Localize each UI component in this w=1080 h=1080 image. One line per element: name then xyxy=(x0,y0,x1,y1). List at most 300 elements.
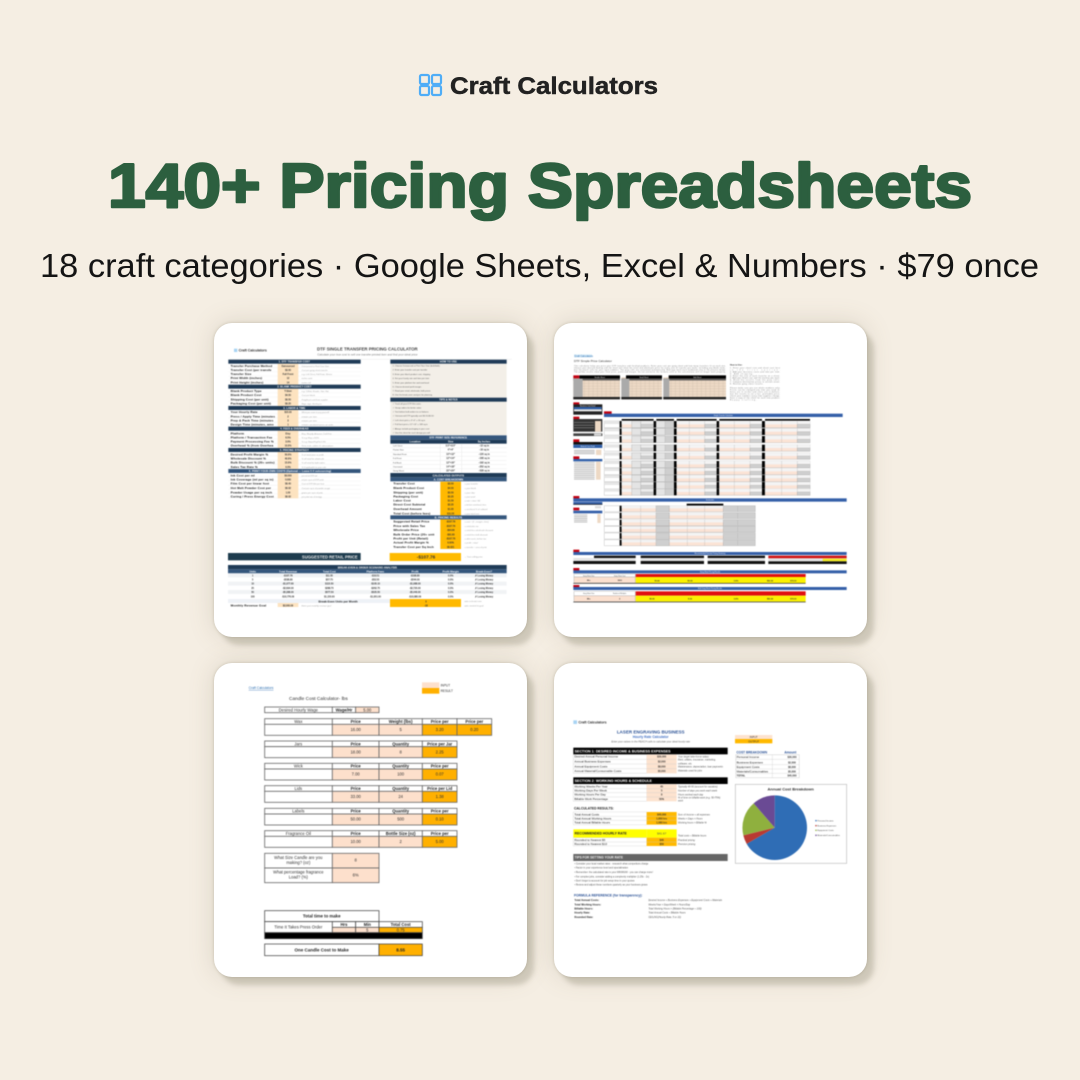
calculated outputs: $0.50 xyxy=(448,492,454,494)
left column: input sections: 40.0% xyxy=(285,457,292,460)
pie chart: annual cost breakdown: Annual Cost Breakdown xyxy=(768,787,814,792)
section 2 xyxy=(573,777,728,803)
calculated outputs: -$107.76 xyxy=(446,522,456,524)
break-even analysis table: Break-Even Units per Month xyxy=(319,599,358,603)
cost breakdown table: Materials/Consumables xyxy=(737,769,769,773)
break-even analysis table: $115.50 xyxy=(325,584,334,586)
calculated results xyxy=(573,807,711,825)
left column: input sections: 1 xyxy=(287,425,289,427)
jar table: 2.25 xyxy=(436,749,444,754)
break-even analysis table: -$108.80 xyxy=(410,575,420,577)
left column: input sections: $0.000 xyxy=(284,475,292,477)
calculated outputs: $4.50 xyxy=(448,487,454,490)
break-even analysis table: Platform Fees xyxy=(367,569,385,573)
calculated outputs: Shipping (per unit) xyxy=(393,490,423,494)
formula reference: Total Working Hours × (Billable Percentage ÷ 100) xyxy=(648,908,702,911)
break-even analysis table: $577.50 xyxy=(325,592,334,594)
labels table: 50.00 xyxy=(350,817,362,822)
sheet heading and instructions: Sizes are in inches and costs are in dollars. xyxy=(730,390,781,393)
labels table: Price xyxy=(351,809,361,814)
break-even analysis table: -$2,694.00 xyxy=(282,587,294,590)
wick table: Price xyxy=(351,764,361,769)
section 1: Materials used for jobs xyxy=(678,770,703,773)
calculated outputs: = your pack xyxy=(465,495,476,498)
left column: input sections: Cost per blank xyxy=(302,394,316,397)
left column: input sections: Cost of DTF film per foot xyxy=(302,483,324,486)
break-even analysis table: -$105.10 xyxy=(371,584,381,586)
calculated outputs: $2.25 xyxy=(448,505,454,507)
size reference table: Full Front xyxy=(393,457,402,460)
legend xyxy=(735,735,772,743)
brand and heading: Enter your values in the PEACH cells to calculate your ideal hourly rate xyxy=(611,740,691,743)
legend: INPUT xyxy=(750,735,758,739)
break-even analysis table: ✗ Losing Money xyxy=(475,591,494,594)
calculated outputs: -$91.60 xyxy=(447,534,455,536)
left column: input sections: e.g. Left Chest, Full Front, Sleeve xyxy=(302,373,333,376)
yellow results row one: $70.00 xyxy=(790,580,797,582)
left column: input sections: 12 xyxy=(287,378,290,380)
left column: input sections: Freight per unit from supplier xyxy=(302,398,328,401)
lids table: Quantity xyxy=(392,786,410,791)
section 2: Billable Work Percentage xyxy=(574,797,608,801)
calculated outputs: -$107.76 xyxy=(446,539,456,541)
section 2: 8 xyxy=(661,794,663,797)
wax table: 0.20 xyxy=(470,727,479,732)
left stack of small tables: Material Cost Profit xyxy=(581,445,595,448)
break-even analysis table: ✗ Losing Money xyxy=(475,574,494,577)
left column: input sections: Blank Product Cost xyxy=(231,393,261,397)
size reference table: Location xyxy=(409,440,421,444)
right column: how to use and tips: 5. Enter your platform fee and overhead xyxy=(393,381,429,384)
left column: input sections: Full Front xyxy=(283,373,294,376)
left column: input sections: minutes per item xyxy=(302,419,317,422)
sheet heading and instructions: Use the results to set a fair, profitable price. xyxy=(730,392,781,395)
section 1: Annual Material/Consumable Costs xyxy=(574,769,622,773)
break-even analysis table: -$10,776.00 xyxy=(282,596,295,598)
left column: input sections: Prep & Pack Time (minutes xyxy=(231,418,274,422)
break-even analysis table: -$544.00 xyxy=(410,579,420,582)
wax table: 5 xyxy=(400,727,403,732)
calculated outputs: = your transfer xyxy=(465,483,478,486)
left column: input sections: 3.0% xyxy=(285,442,292,444)
labels table: Quantity xyxy=(392,809,410,814)
break-even analysis table: -$5,388.00 xyxy=(282,592,294,594)
wage row: Wage/Hr xyxy=(336,707,353,712)
destination calculator: Destination xyxy=(706,499,714,502)
calculated outputs: = cost ÷ (1 - margin - fees) xyxy=(465,521,489,524)
break-even analysis table: ✗ Losing Money xyxy=(475,579,494,582)
left column: input sections: What you want to pay yourself xyxy=(302,411,330,414)
left column: input sections: $4.50 xyxy=(285,394,292,397)
legend: OUTPUT xyxy=(748,739,760,743)
cost breakdown table: $8,000 xyxy=(788,766,796,769)
break-even analysis table: -$525.50 xyxy=(371,592,381,594)
left column: input sections: 1.00 xyxy=(286,492,291,494)
lids table: Price per Lid xyxy=(427,786,453,791)
left column: input sections: $0.40 xyxy=(285,483,292,486)
recommended hourly rate: $45 xyxy=(660,839,664,842)
calculated outputs: Actual Profit Margin % xyxy=(393,541,429,545)
section 1: Annual Business Expenses xyxy=(574,760,611,764)
left column: input sections: Transfer Purchase Method xyxy=(231,364,272,368)
three top sheet-size tables xyxy=(573,375,726,399)
cost breakdown table: $45,000 xyxy=(787,774,797,777)
calculated outputs: = retail plus tax xyxy=(465,525,479,528)
sheet heading and instructions: 4. Enter the size of each transfer on a sheet. xyxy=(730,374,781,377)
three top sheet-size tables: Smaller Sheet xyxy=(594,376,605,379)
section 1: Annual Equipment Costs xyxy=(574,764,608,768)
wick table xyxy=(265,763,457,780)
tips: • Review and adjust these numbers quarterly as your business grows xyxy=(574,884,648,887)
yellow results row two: $0.00 xyxy=(649,599,655,601)
total time table: Time It Takes Press Order xyxy=(274,925,323,930)
left column: input sections: 10.0% xyxy=(285,446,292,448)
left column: input sections: 2. BLANK PRODUCT COST xyxy=(277,385,312,389)
break-even analysis table: -$10,880.00 xyxy=(409,596,422,598)
suggested retail price banner: SUGGESTED RETAIL PRICE xyxy=(302,554,358,559)
break-even analysis table: Total Revenue xyxy=(279,569,297,573)
calculated outputs: = your ship xyxy=(465,491,476,494)
total time table: 5 xyxy=(366,928,369,933)
left column: input sections: $15.00 xyxy=(284,412,292,414)
section 1 xyxy=(573,748,728,773)
lids table: 1.38 xyxy=(436,794,444,799)
fragrance oil table: Bottle Size (oz) xyxy=(386,831,416,836)
calculated outputs: Blank Product Cost xyxy=(393,486,424,490)
recommended hourly rate: Rounded to Nearest $10 xyxy=(574,842,607,846)
break-even analysis table: 0.0% xyxy=(448,592,454,594)
right column: how to use and tips: ✓ Track all your DTF film costs xyxy=(393,402,421,405)
size reference table: Oversized xyxy=(393,465,402,468)
cost breakdown table: Personal Income xyxy=(737,755,760,759)
right column: how to use and tips: ✓ Left chest print = 4"×4" = 16 sq in xyxy=(393,419,425,422)
yellow results row two xyxy=(573,585,847,602)
right column: how to use and tips: 8. Use the break-even analysis for planning xyxy=(393,394,432,397)
size reference table: Pocket Size xyxy=(393,449,405,452)
formula reference: Total Working Hours: xyxy=(574,902,601,906)
calculated outputs: B. PRICING RESULTS xyxy=(435,515,462,519)
jar table: 18.00 xyxy=(350,749,362,754)
right column: how to use and tips: 2. Enter your transfer cost per transfer xyxy=(393,369,428,372)
link and legend: INPUT xyxy=(441,683,450,687)
left column: input sections: 50.0% xyxy=(285,454,292,456)
fragrance oil table: Price xyxy=(351,831,361,836)
formula reference: Total Annual Costs: xyxy=(574,898,599,902)
size reference table: 3.5"×3.5" xyxy=(446,445,456,448)
labels table: Price per xyxy=(431,809,449,814)
section 1: Desired Annual Personal Income xyxy=(574,755,618,759)
formula reference: Rounded Rate: xyxy=(574,915,593,919)
brand and heading xyxy=(573,720,691,743)
sheet heading xyxy=(228,346,512,359)
fragrance oil table: 10.00 xyxy=(350,839,362,844)
right column: how to use and tips: HOW TO USE xyxy=(440,360,457,364)
break-even analysis table: 0.0% xyxy=(448,580,454,582)
recommended hourly rate: Premium pricing xyxy=(678,843,696,846)
sheet heading and instructions: 3. Add shipping. xyxy=(730,372,754,375)
size reference table: ~528 sq in xyxy=(478,471,490,473)
panel: DTF single transfer pricing calculator xyxy=(214,323,527,637)
yellow results row one xyxy=(573,568,847,584)
break-even analysis table: -$1,077.60 xyxy=(282,584,294,586)
right column: how to use and tips: ✓ Always include packaging in your cost xyxy=(393,427,430,430)
calculated outputs: CALCULATED OUTPUTS xyxy=(433,473,464,477)
labels table: 0.10 xyxy=(436,817,444,822)
lids table: 33.00 xyxy=(350,794,362,799)
section 1: Your target take-home salary xyxy=(678,755,709,758)
brand and heading: Hourly Rate Calculator xyxy=(633,735,669,739)
left column: input sections: 6.5% xyxy=(285,437,292,439)
break-even analysis table: Enter your monthly revenue goal xyxy=(302,604,332,607)
suggested retail price banner: ← Your selling price xyxy=(464,556,483,559)
calculated outputs: Suggested Retail Price xyxy=(393,520,430,524)
break-even analysis table: Profit Margin xyxy=(442,569,459,573)
break-even analysis table: -$52.55 xyxy=(371,580,380,582)
size reference table: ~252 sq in xyxy=(478,466,490,468)
sheet heading and instructions: Choose your desired markup and the sheet will show the retail and wholesale price for every size of transfer you make, including any blank items. xyxy=(574,367,726,370)
left column: input sections: $0.50 xyxy=(285,399,292,401)
break-even analysis table: units to break even xyxy=(464,600,482,603)
left column: input sections: % off retail for wholesale xyxy=(302,457,325,460)
break-even analysis table: -$2,720.00 xyxy=(409,588,421,590)
cost breakdown table: $5,000 xyxy=(788,770,796,773)
pricing comparison tables xyxy=(573,550,847,564)
recommended hourly rate: $50 xyxy=(660,843,664,846)
calculated results: Total Annual Billable Hours xyxy=(574,821,611,825)
calculated outputs: Packaging Cost xyxy=(393,494,418,498)
left column: input sections: T-Shirt xyxy=(284,390,292,393)
cost breakdown table: $30,000 xyxy=(787,756,797,759)
calculated outputs: = your blank xyxy=(465,487,477,490)
break-even analysis table: $288.75 xyxy=(325,588,334,590)
left column: input sections: 4. FEES & OVERHEAD xyxy=(280,427,309,431)
wick table: Wick xyxy=(294,764,304,769)
size reference table: 22"×24" xyxy=(446,470,455,473)
calculated results: Total Annual Working Hours xyxy=(574,816,612,820)
pie chart: annual cost breakdown: Materials/Consumables xyxy=(817,834,840,837)
total time table: Total Cost xyxy=(391,922,411,927)
left column: input sections: Cost per sq in of powder usage xyxy=(302,487,331,490)
break-even analysis table: 0 xyxy=(425,601,427,603)
calculated outputs: Overhead Amount xyxy=(393,507,422,511)
left column: input sections: Hot Melt Powder Cost per xyxy=(231,486,272,490)
wick table: Quantity xyxy=(392,764,410,769)
break-even analysis table: $11.55 xyxy=(326,575,334,577)
left column: input sections: Payment Processing Fee % xyxy=(231,440,274,444)
link and legend: RESULT xyxy=(441,689,453,693)
yellow results row one: $50.00 xyxy=(767,580,774,582)
left column: input sections: per ml of DTF ink xyxy=(301,474,318,477)
tips: • Consider your local market rates - research what competitors charge xyxy=(574,863,649,866)
break-even analysis table: 25 xyxy=(251,588,255,590)
wage row: 5.00 xyxy=(363,707,372,712)
section 2: 5 xyxy=(661,790,663,793)
left column: input sections: inches tall xyxy=(302,381,311,384)
calculated outputs: -$64.66 xyxy=(447,529,455,532)
total time table xyxy=(265,911,422,939)
calculated outputs: $1.50 xyxy=(448,500,454,502)
labels table: 500 xyxy=(397,817,405,822)
size reference table: DTF PRINT SIZE REFERENCE xyxy=(430,436,467,440)
left column: input sections: Platform / Transaction Fee xyxy=(231,435,273,439)
sheet heading and instructions: 5. Add your blank cost and the markup you want. xyxy=(730,376,781,379)
fragrance oil table: 5.00 xyxy=(436,839,444,844)
section 1: software, etc. xyxy=(678,762,693,765)
yellow results row two: Bulk Gang Sheet Pricing Results xyxy=(698,587,722,590)
jar table: Price per Jar xyxy=(427,741,453,746)
pie chart: annual cost breakdown: Business Expenses xyxy=(817,825,836,827)
left column: input sections: Ink Cost per ml xyxy=(231,473,255,477)
fragrance oil table: Price per xyxy=(431,831,449,836)
total time table: Total time to make xyxy=(303,914,341,919)
panel: DTF simple price calculator xyxy=(554,323,867,637)
main single transfer calculator: Single Transfer Calculator xyxy=(714,414,733,417)
suggested retail price banner xyxy=(228,553,483,561)
recommended hourly rate: RECOMMENDED HOURLY RATE xyxy=(575,832,628,836)
left stack of small tables xyxy=(573,402,602,480)
one candle cost result: 8.55 xyxy=(396,947,406,952)
suggested retail price banner: -$107.76 xyxy=(417,555,436,560)
sheet heading and instructions: The yellow results show your final price, profit and margin. Do not overwrite the formula cells or the calculations will no longer work properly. xyxy=(574,371,726,374)
left column: input sections: Press / Apply Time (minutes xyxy=(231,414,275,418)
size reference table: 12"×16" xyxy=(446,461,455,464)
brand name: Craft Calculators xyxy=(450,73,658,100)
calculated results: Weeks × Days × Hours xyxy=(678,817,703,820)
calculated outputs: Profit per Unit (Retail) xyxy=(393,537,428,541)
left column: input sections: Bags, tags, thank-you xyxy=(302,402,322,405)
candle size and fragrance load inputs: What Size Candle are you xyxy=(274,855,323,860)
formula reference: Weeks/Year × Days/Week × Hours/Day xyxy=(648,903,691,906)
size reference table: Size xyxy=(448,440,454,444)
left column: input sections: inches wide xyxy=(302,378,313,380)
left column: input sections: Platform xyxy=(231,431,244,435)
three top sheet-size tables: Small Sheet xyxy=(640,376,649,379)
header: brand, title and subtitle xyxy=(40,73,1039,285)
calculated results: $45,000 xyxy=(657,813,667,816)
left column: input sections: % off retail for bulk orders xyxy=(302,462,325,465)
labels table: Labels xyxy=(292,809,304,814)
break-even analysis table: 0.0% xyxy=(448,588,454,590)
left column: input sections: 3 xyxy=(287,420,289,422)
wage row xyxy=(265,707,379,713)
break-even analysis table: -$1,088.00 xyxy=(409,584,421,586)
tips: TIPS FOR SETTING YOUR RATE xyxy=(575,856,623,860)
recommended hourly rate xyxy=(573,829,707,846)
left column: input sections: minutes amortized across an order xyxy=(302,424,333,427)
size reference table: ~12 sq in xyxy=(479,446,490,448)
yellow results row two: Gang Sheet Size xyxy=(583,592,595,595)
right column: how to use and tips: TIPS & NOTES xyxy=(439,398,458,402)
wick table: 0.07 xyxy=(436,772,444,777)
yellow results row two: $.00 xyxy=(688,599,693,601)
link and legend: Craft Calculators xyxy=(249,686,274,690)
sheet title: Candle Cost Calculator- lbs xyxy=(289,696,348,702)
cost breakdown table: Amount xyxy=(784,751,797,755)
break-even analysis table xyxy=(228,565,507,607)
break-even analysis table: 100 xyxy=(251,596,255,598)
calculated outputs: = before overhead, fees xyxy=(465,504,486,507)
wax table: 16.00 xyxy=(350,727,362,732)
calculated outputs: A. COST BREAKDOWN xyxy=(434,477,463,481)
left column: input sections: $0.25 xyxy=(285,403,292,405)
sheet heading: Calculate your true cost to sell one transfer-printed item and find your ideal price xyxy=(317,353,418,357)
calculated outputs: = transfer ÷ area of print xyxy=(465,546,487,549)
wick table: 100 xyxy=(397,772,405,777)
break-even analysis table: $2,000.00 xyxy=(283,605,294,607)
left column: input sections: minutes per item xyxy=(302,415,317,418)
left column: input sections: Curing / Press Energy Cost xyxy=(231,494,274,498)
sheet heading and instructions: This calculator helps you price your DTF transfers and finished products. Enter your cost per gang sheet and how many transfers fit on each one. xyxy=(574,365,726,368)
wax table: Wax xyxy=(294,719,303,724)
left column: input sections: $0.02 xyxy=(285,496,292,498)
left column: input sections: grams per sq in of print xyxy=(302,491,323,494)
break-even analysis table: Break-Even? xyxy=(476,569,492,573)
pie chart: annual cost breakdown: Personal Income xyxy=(817,819,834,822)
break-even analysis table: -$538.80 xyxy=(283,580,293,582)
candle size and fragrance load inputs: making? (oz) xyxy=(286,860,311,865)
left column: input sections: 5. PRICING STRATEGY xyxy=(280,448,309,452)
calculated outputs: = your total cost xyxy=(465,512,480,515)
section 2: SECTION 2: WORKING HOURS & SCHEDULE xyxy=(575,779,653,783)
left column: input sections: Wholesale Discount % xyxy=(231,456,266,460)
calculated outputs: = after costs, before tax xyxy=(465,538,487,541)
brand and heading: Craft Calculators xyxy=(578,721,607,725)
section 1: SECTION 1: DESIRED INCOME & BUSINESS EXPENSES xyxy=(575,749,671,753)
left column: input sections: Outsourced xyxy=(281,365,295,368)
left column: input sections: 3. LABOR & TIME xyxy=(283,406,306,410)
jar table: 8 xyxy=(400,749,403,754)
sheet heading: DTF SINGLE TRANSFER PRICING CALCULATOR xyxy=(317,346,418,351)
calculated outputs: Labor Cost xyxy=(393,498,411,502)
wick table: 7.00 xyxy=(352,772,360,777)
right column: how to use and tips: 3. Enter your blank product cost, shipping xyxy=(393,373,430,376)
section 1: Rent, utilities, insurance, marketing, xyxy=(678,759,716,762)
left column: input sections: 0.0% xyxy=(285,467,292,469)
size reference table: 4"×4" xyxy=(448,449,454,452)
lids table: Lids xyxy=(295,786,302,791)
tips xyxy=(573,854,728,887)
break-even analysis table: units needed for goal xyxy=(464,604,484,607)
subtitle: 18 craft categories · Google Sheets, Excel & Numbers · $79 once xyxy=(40,248,1039,285)
size reference table: ~192 sq in xyxy=(478,462,490,464)
sheet heading and instructions: Save a copy of the sheet for each new product. xyxy=(730,396,781,399)
sheet heading and instructions: 2. Add your business costs and time per item. xyxy=(730,370,781,373)
calculated outputs: -$107.76 xyxy=(446,526,456,528)
cost breakdown table: Business Expenses xyxy=(737,761,763,765)
right column: how to use and tips: ✓ Group orders for better value xyxy=(393,406,422,409)
section 1: $30,000 xyxy=(657,756,667,759)
break-even analysis table: $57.75 xyxy=(326,580,334,582)
size reference table: ~120 sq in xyxy=(478,454,490,456)
calculated outputs: Transfer Cost per Sq Inch xyxy=(393,545,434,549)
left column: input sections: Transfer Size xyxy=(231,372,252,376)
calculated results: Total Annual Costs xyxy=(574,812,600,816)
left column: input sections: Print Width (inches) xyxy=(231,376,262,380)
section 2: 50% xyxy=(659,798,665,801)
candle size and fragrance load inputs: Load? (%) xyxy=(289,874,309,879)
total time table: 0.75 xyxy=(397,928,405,933)
right column: how to use and tips: 4. Set your hourly rate and time per item xyxy=(393,377,429,380)
calculated outputs: $1.05 xyxy=(448,509,454,511)
recommended hourly rate: Practical pricing xyxy=(678,839,696,842)
yellow results row two: $70.00 xyxy=(790,599,797,601)
formula reference: Billable Hours: xyxy=(574,907,593,911)
left column: input sections: 0.000 xyxy=(285,480,292,482)
tips: • Remember: the calculated rate is your MINIMUM - you can charge more! xyxy=(574,871,653,874)
left column: input sections: 2 xyxy=(287,416,289,418)
formula reference: Desired Income + Business Expenses + Equipment Costs + Materials xyxy=(648,899,723,902)
wax table: Weight (lbs) xyxy=(389,719,413,724)
